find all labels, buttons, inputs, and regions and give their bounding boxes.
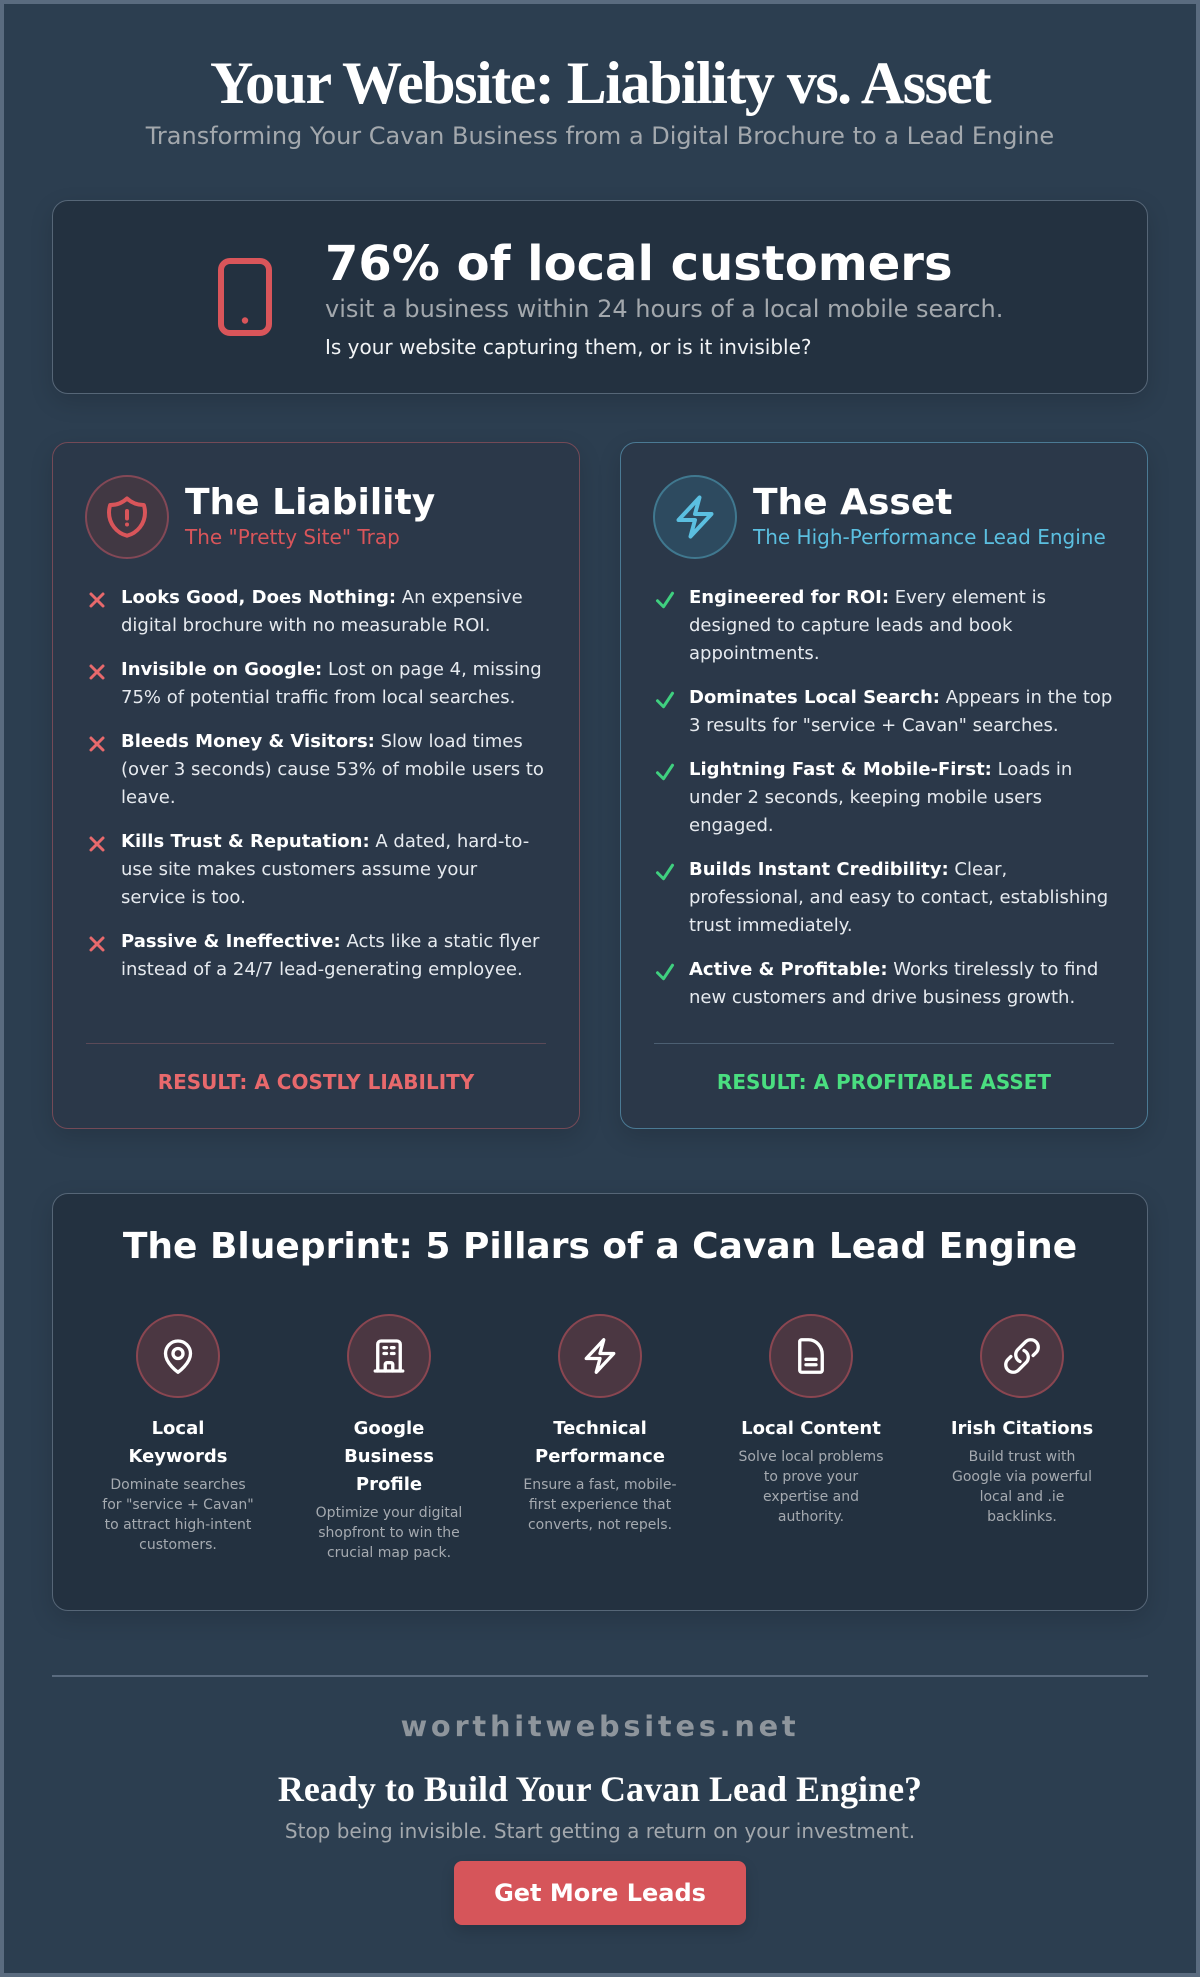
pillar description [952, 1449, 1092, 1525]
liability item 1 [89, 587, 523, 636]
liability item 5 [89, 931, 540, 980]
liability item 3 [89, 731, 544, 808]
pillar: local keywords [102, 1314, 254, 1553]
liability list [89, 587, 544, 980]
asset item 5 [656, 959, 1098, 1008]
liability item 3: leave. [121, 787, 176, 808]
pillar description: Build trust with [969, 1449, 1075, 1465]
pillar description: authority. [778, 1509, 844, 1525]
pillar title: Local [152, 1418, 204, 1439]
subheading: lead engine: The High-Performance Lead Engine [753, 525, 1106, 549]
icon: link [980, 1314, 1064, 1398]
asset item 4: Builds Instant Credibility: Clear, [689, 859, 1007, 880]
pillar title: Business [344, 1446, 434, 1467]
pillar: local content [738, 1314, 883, 1525]
pillar description: crucial map pack. [327, 1545, 451, 1561]
asset item 4: trust immediately. [689, 915, 853, 936]
pillar description: Optimize your digital [316, 1505, 462, 1521]
liability item 4: Kills Trust & Reputation: A dated, hard-to- [121, 831, 529, 852]
asset item 5: Active & Profitable: Works tirelessly to find [689, 959, 1098, 980]
liability item 2 [89, 659, 542, 708]
liability item 5: Passive & Ineffective: Acts like a static flyer [121, 931, 539, 952]
asset item 4: professional, and easy to contact, establishing [689, 887, 1108, 908]
asset item 2 [656, 687, 1112, 736]
icon: shield alert [85, 475, 169, 559]
asset item 1: designed to capture leads and book [689, 615, 1012, 636]
liability item 4 [89, 831, 529, 908]
asset item 4 [656, 859, 1108, 936]
pillar description: Ensure a fast, mobile- [523, 1477, 677, 1493]
pillar description: Google via powerful [952, 1469, 1092, 1485]
button: get more leads [454, 1861, 746, 1925]
liability item 4: use site makes customers assume your [121, 859, 477, 880]
title: Your Website: Liability vs. Asset [210, 50, 990, 116]
panel: hero statistic [52, 200, 1148, 394]
brand name: worthitwebsites.net [401, 1709, 799, 1743]
asset item 5: new customers and drive business growth. [689, 987, 1075, 1008]
pillar description: backlinks. [987, 1509, 1057, 1525]
pillar description: customers. [139, 1537, 217, 1553]
pillar description: shopfront to win the [318, 1525, 460, 1541]
pillar: google business profile [316, 1314, 462, 1561]
asset item 2: Dominates Local Search: Appears in the top [689, 687, 1112, 708]
heading: the blueprint: The Blueprint: 5 Pillars of a Cavan Lead Engine [123, 1226, 1077, 1267]
pillar title [344, 1418, 434, 1495]
icon: lightning bolt [558, 1314, 642, 1398]
asset item 2: 3 results for "service + Cavan" searches. [689, 715, 1059, 736]
pillar description [738, 1449, 883, 1525]
pillar description: to prove your [764, 1469, 858, 1485]
pillar: technical performance [523, 1314, 677, 1533]
liability item 3: (over 3 seconds) cause 53% of mobile users to [121, 759, 544, 780]
icon: document [769, 1314, 853, 1398]
statistic headline: 76% of local customers [325, 236, 953, 292]
statistic question: Is your website capturing them, or is it invisible? [325, 335, 812, 359]
subheading: pretty site trap: The "Pretty Site" Trap [185, 525, 400, 549]
result: profitable asset: RESULT: A PROFITABLE ASSET [717, 1070, 1051, 1094]
heading: the asset: The Asset [753, 482, 952, 523]
liability item 4: service is too. [121, 887, 246, 908]
liability item 5: instead of a 24/7 lead-generating employee. [121, 959, 523, 980]
liability item 1: digital brochure with no measurable ROI. [121, 615, 490, 636]
pillar description: local and .ie [980, 1489, 1064, 1505]
asset item 3 [656, 759, 1072, 836]
icon: smartphone [218, 258, 272, 336]
pillar title: Local Content [741, 1418, 881, 1439]
panel: blueprint pillars [52, 1193, 1148, 1611]
pillar title: Performance [535, 1446, 665, 1467]
asset item 1: Engineered for ROI: Every element is [689, 587, 1046, 608]
liability item 1: Looks Good, Does Nothing: An expensive [121, 587, 523, 608]
pillar description: for "service + Cavan" [102, 1497, 254, 1513]
pillar title: Google [354, 1418, 424, 1439]
asset list [656, 587, 1112, 1008]
statistic description: visit a business within 24 hours of a local mobile search. [325, 295, 1003, 323]
pillar title: Technical [553, 1418, 647, 1439]
liability item 2: 75% of potential traffic from local searches. [121, 687, 515, 708]
pillar title: Profile [356, 1474, 422, 1495]
pillar title: Keywords [128, 1446, 228, 1467]
panel: the liability [52, 442, 580, 1129]
result: costly liability: RESULT: A COSTLY LIABILITY [158, 1070, 474, 1094]
pillar title [128, 1418, 228, 1467]
call to action heading: Ready to Build Your Cavan Lead Engine? [278, 1769, 922, 1809]
panel: the asset [620, 442, 1148, 1129]
pillar description [102, 1477, 254, 1553]
pillar description: expertise and [763, 1489, 859, 1505]
pillar description: to attract high-intent [105, 1517, 251, 1533]
pillar description: Dominate searches [110, 1477, 246, 1493]
pillar description: Solve local problems [738, 1449, 883, 1465]
asset item 1: appointments. [689, 643, 820, 664]
pillar title [535, 1418, 665, 1467]
asset item 3: Lightning Fast & Mobile-First: Loads in [689, 759, 1072, 780]
pillar description [523, 1477, 677, 1533]
icon: lightning bolt [653, 475, 737, 559]
liability item 3: Bleeds Money & Visitors: Slow load times [121, 731, 523, 752]
pillar description [316, 1505, 462, 1561]
pillar description: converts, not repels. [528, 1517, 672, 1533]
asset item 3: engaged. [689, 815, 774, 836]
heading: the liability: The Liability [185, 482, 435, 523]
pillar: irish citations [951, 1314, 1093, 1525]
pillar description: first experience that [529, 1497, 671, 1513]
subtitle: Transforming Your Cavan Business from a Digital Brochure to a Lead Engine [146, 122, 1054, 150]
liability item 2: Invisible on Google: Lost on page 4, missing [121, 659, 542, 680]
icon: map pin [136, 1314, 220, 1398]
icon: building [347, 1314, 431, 1398]
call to action text: Stop being invisible. Start getting a return on your investment. [285, 1819, 915, 1843]
asset item 3: under 2 seconds, keeping mobile users [689, 787, 1042, 808]
asset item 1 [656, 587, 1046, 664]
button: get more leads: Get More Leads [494, 1879, 706, 1907]
pillar title: Irish Citations [951, 1418, 1093, 1439]
